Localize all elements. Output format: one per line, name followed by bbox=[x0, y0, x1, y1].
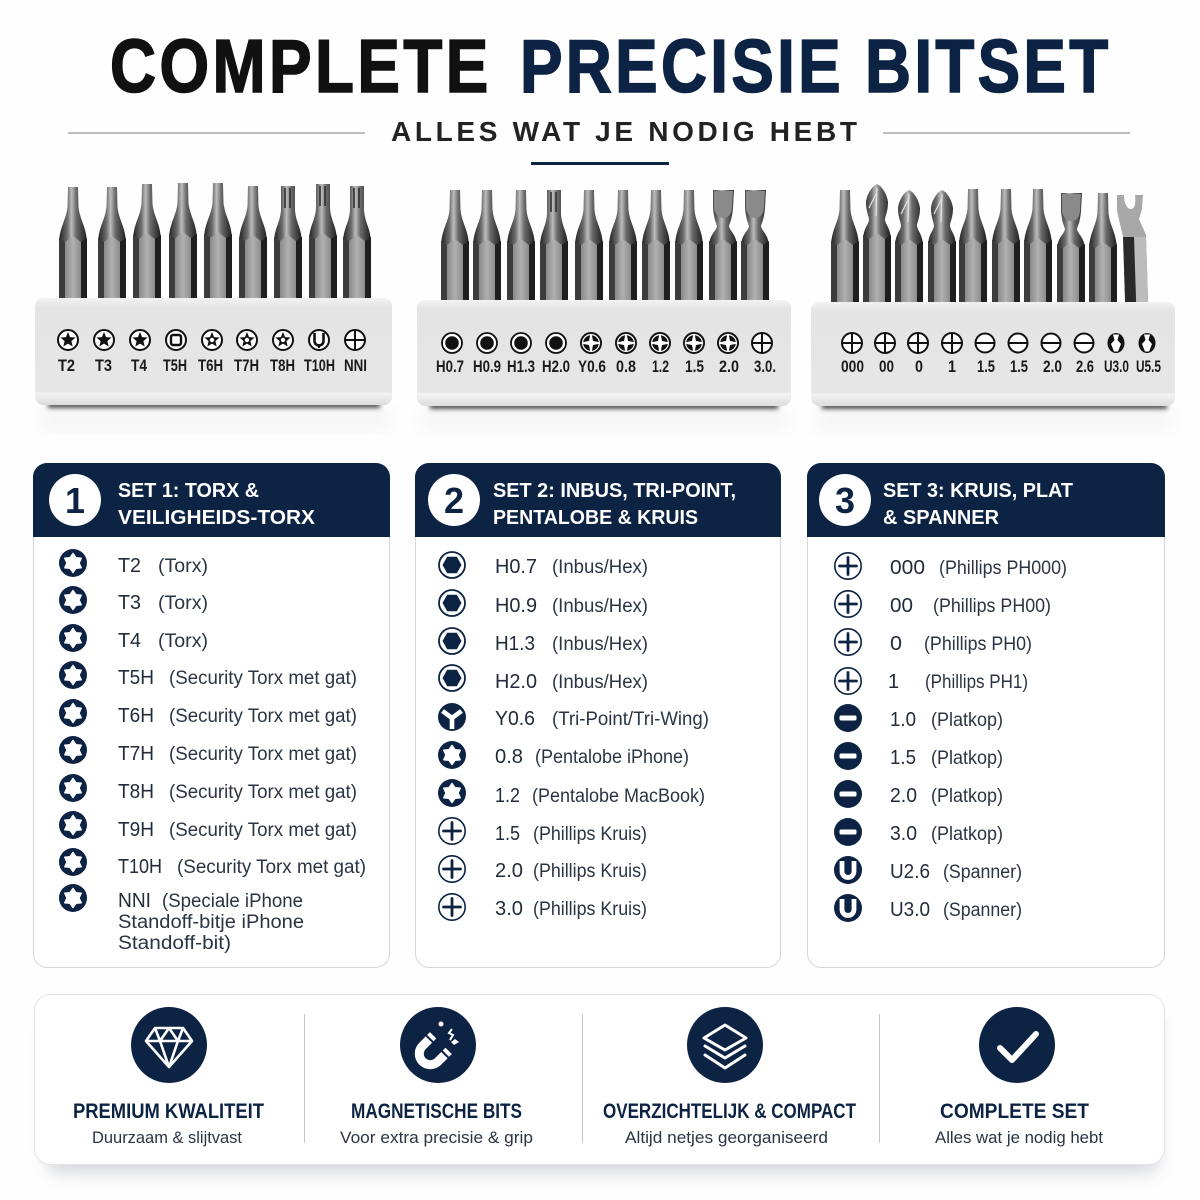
row T8H: T8H bbox=[118, 781, 154, 803]
row 0.8: 0.8 bbox=[495, 746, 523, 768]
title bbox=[110, 24, 1108, 108]
row 00: 00 bbox=[890, 595, 913, 617]
row NNI: Standoff-bitje iPhone bbox=[118, 912, 304, 933]
product photo: set 1 bit holder: T3 bbox=[95, 356, 112, 375]
product photo: set 3 bit holder: 1.5 bbox=[1010, 357, 1028, 376]
icon: diamond bbox=[131, 1007, 207, 1083]
row 000: 000 bbox=[890, 557, 925, 579]
panel header: set 1 bbox=[33, 463, 390, 537]
row U3.0: (Spanner) bbox=[943, 900, 1022, 921]
bits of set 2 bbox=[441, 190, 769, 325]
product photo: set 2 bit holder: H0.7 bbox=[436, 357, 464, 376]
row T9H bbox=[59, 811, 357, 841]
row 3.0 bbox=[834, 818, 1003, 846]
row 2.0: (Phillips Kruis) bbox=[533, 861, 647, 882]
product photo: set 1 bit holder: T4 bbox=[131, 356, 147, 375]
panel header: set 2: SET 2: INBUS, TRI-POINT, bbox=[493, 480, 736, 502]
row T6H: (Security Torx met gat) bbox=[169, 706, 357, 727]
row H0.7: H0.7 bbox=[495, 556, 537, 578]
subtitle: ALLES WAT JE NODIG HEBT bbox=[391, 116, 857, 147]
row H0.7: (Inbus/Hex) bbox=[552, 557, 648, 578]
feature: premium kwaliteit bbox=[73, 1007, 264, 1147]
row T10H bbox=[59, 848, 366, 878]
feature: magnetische bits bbox=[340, 1007, 533, 1147]
row 1.0: (Platkop) bbox=[931, 710, 1003, 731]
row 3.0: 3.0 bbox=[495, 898, 523, 920]
row T9H: (Security Torx met gat) bbox=[169, 820, 357, 841]
row 1.5: 1.5 bbox=[890, 747, 916, 769]
row H1.3: (Inbus/Hex) bbox=[552, 634, 648, 655]
product photo: set 3 bit holder: U3.0 bbox=[1104, 357, 1129, 376]
row T8H: (Security Torx met gat) bbox=[169, 782, 357, 803]
row T7H bbox=[59, 736, 357, 765]
row T4: T4 bbox=[118, 630, 141, 652]
row 2.0: 2.0 bbox=[495, 860, 523, 882]
row 3.0: (Phillips Kruis) bbox=[533, 899, 647, 920]
feature: magnetische bits: Voor extra precisie & grip bbox=[340, 1129, 533, 1147]
row 3.0: 3.0 bbox=[890, 823, 917, 845]
product photo: set 1 bit holder: T8H bbox=[270, 356, 295, 375]
feature: complete set: COMPLETE SET bbox=[940, 1100, 1089, 1123]
product photo: set 1 bit holder: NNI bbox=[344, 356, 367, 375]
row 1.5: (Phillips Kruis) bbox=[533, 824, 647, 845]
row T9H: T9H bbox=[118, 819, 154, 841]
panel: set 1 bbox=[33, 463, 390, 968]
row 0.8: (Pentalobe iPhone) bbox=[535, 747, 689, 768]
row 1 bbox=[835, 668, 1028, 694]
row H2.0 bbox=[439, 665, 648, 693]
panel header: set 2: PENTALOBE & KRUIS bbox=[493, 507, 698, 529]
row 1.5: (Platkop) bbox=[931, 748, 1003, 769]
row 00: (Phillips PH00) bbox=[933, 596, 1051, 617]
bits of set 1 bbox=[59, 183, 371, 322]
panel header: set 1: SET 1: TORX & bbox=[118, 480, 259, 502]
panel: feature strip bbox=[34, 994, 1164, 1174]
product photo: set 3 bit holder: 0 bbox=[915, 357, 923, 376]
product photo: set 2 bit holder: 1.5 bbox=[685, 357, 704, 376]
title: PRECISIE BITSET bbox=[520, 24, 1108, 108]
row T4 bbox=[59, 624, 208, 652]
row 0: 0 bbox=[890, 633, 902, 655]
row H1.3 bbox=[439, 628, 648, 655]
row 0.8 bbox=[438, 741, 689, 769]
product photo: set 3 bit holder bbox=[811, 184, 1175, 431]
row H2.0: H2.0 bbox=[495, 671, 537, 693]
panel header: set 3: 3 bbox=[835, 480, 855, 521]
product photo: set 1 bit holder: T2 bbox=[58, 356, 75, 375]
product photo: set 3 bit holder: 1 bbox=[948, 357, 956, 376]
row NNI: NNI bbox=[118, 890, 151, 912]
product photo: set 2 bit holder: H2.0 bbox=[542, 357, 570, 376]
feature: overzichtelijk en compact: OVERZICHTELIJK & COMPACT bbox=[603, 1100, 856, 1123]
icon: layers bbox=[687, 1007, 763, 1083]
row U2.6 bbox=[834, 856, 1022, 884]
product photo: set 1 bit holder bbox=[35, 183, 392, 430]
row H1.3: H1.3 bbox=[495, 633, 535, 655]
feature: magnetische bits: MAGNETISCHE BITS bbox=[351, 1100, 522, 1123]
product photo: set 2 bit holder: H1.3 bbox=[507, 357, 535, 376]
product photo: set 2 bit holder: 1.2 bbox=[652, 357, 669, 376]
product photo: set 2 bit holder: H0.9 bbox=[473, 357, 501, 376]
row 1.2 bbox=[438, 779, 705, 807]
row T3: (Torx) bbox=[158, 593, 208, 614]
product photo: set 3 bit holder: U5.5 bbox=[1136, 357, 1161, 376]
row Y0.6: Y0.6 bbox=[495, 708, 535, 730]
row T3: T3 bbox=[118, 592, 141, 614]
row 000 bbox=[835, 553, 1067, 579]
row T7H: T7H bbox=[118, 743, 154, 765]
product photo: set 3 bit holder: 2.0 bbox=[1043, 357, 1062, 376]
row T2 bbox=[59, 549, 208, 577]
row 0: (Phillips PH0) bbox=[924, 634, 1032, 655]
row T10H: T10H bbox=[118, 856, 162, 878]
row 0 bbox=[835, 629, 1032, 655]
row T6H: T6H bbox=[118, 705, 154, 727]
product photo: set 2 bit holder: 2.0 bbox=[719, 357, 739, 376]
row 000: (Phillips PH000) bbox=[939, 558, 1067, 579]
row 1.2: (Pentalobe MacBook) bbox=[532, 786, 705, 807]
feature: premium kwaliteit: PREMIUM KWALITEIT bbox=[73, 1100, 264, 1123]
row 1: (Phillips PH1) bbox=[925, 672, 1028, 693]
feature: overzichtelijk en compact: Altijd netjes georganiseerd bbox=[625, 1129, 828, 1147]
product photo: set 1 bit holder: T5H bbox=[163, 356, 187, 375]
row 1.0 bbox=[834, 704, 1003, 732]
row H0.9: (Inbus/Hex) bbox=[552, 596, 648, 617]
row U3.0: U3.0 bbox=[890, 899, 930, 921]
row 2.0 bbox=[439, 856, 647, 882]
panel header: set 1: 1 bbox=[65, 480, 85, 521]
panel: set 2 bbox=[415, 463, 781, 968]
row H0.7 bbox=[439, 552, 648, 578]
panel header: set 2: 2 bbox=[444, 480, 464, 521]
panel header: set 3: & SPANNER bbox=[883, 507, 1000, 529]
panel: set 3 bbox=[807, 463, 1165, 968]
row 1.5: 1.5 bbox=[495, 823, 520, 845]
row NNI: Standoff-bit) bbox=[118, 933, 231, 954]
row 1.0: 1.0 bbox=[890, 709, 916, 731]
row T4: (Torx) bbox=[158, 631, 208, 652]
product photo: set 2 bit holder: 0.8 bbox=[616, 357, 636, 376]
panel header: set 3 bbox=[807, 463, 1165, 537]
row U3.0 bbox=[834, 894, 1022, 922]
row T8H bbox=[59, 774, 357, 803]
product photo: set 2 bit holder: Y0.6 bbox=[578, 357, 606, 376]
product photo: set 2 bit holder: 3.0. bbox=[754, 357, 776, 376]
product photo: set 1 bit holder: T10H bbox=[304, 356, 335, 375]
row H2.0: (Inbus/Hex) bbox=[552, 672, 648, 693]
row T10H: (Security Torx met gat) bbox=[177, 857, 366, 878]
product photo: set 3 bit holder: 00 bbox=[879, 357, 894, 376]
row 3.0: (Platkop) bbox=[931, 824, 1003, 845]
product photo: set 2 bit holder bbox=[417, 190, 791, 431]
row 1: 1 bbox=[888, 671, 899, 693]
row NNI bbox=[59, 884, 304, 954]
row 2.0 bbox=[834, 780, 1003, 808]
title: COMPLETE bbox=[110, 24, 488, 108]
row T3 bbox=[59, 586, 208, 614]
panel header: set 1: VEILIGHEIDS-TORX bbox=[118, 507, 316, 529]
feature: complete set: Alles wat je nodig hebt bbox=[935, 1129, 1103, 1147]
row 2.0: 2.0 bbox=[890, 785, 917, 807]
row NNI: (Speciale iPhone bbox=[162, 891, 303, 912]
row T2: T2 bbox=[118, 555, 141, 577]
bits of set 3 bbox=[831, 184, 1149, 330]
row H0.9: H0.9 bbox=[495, 595, 537, 617]
feature: overzichtelijk en compact bbox=[603, 1007, 856, 1147]
row T5H: (Security Torx met gat) bbox=[169, 668, 357, 689]
product photo: set 1 bit holder: T7H bbox=[234, 356, 259, 375]
product photo: set 3 bit holder: 1.5 bbox=[977, 357, 995, 376]
feature: complete set bbox=[935, 1007, 1103, 1147]
row Y0.6 bbox=[438, 703, 709, 731]
icon: magnet bbox=[400, 1007, 476, 1083]
product photo: set 1 bit holder: T6H bbox=[198, 356, 223, 375]
product photo: set 3 bit holder: 000 bbox=[841, 357, 864, 376]
panel header: set 2 bbox=[415, 463, 781, 537]
product photo: set 3 bit holder: 2.6 bbox=[1076, 357, 1094, 376]
row H0.9 bbox=[439, 590, 648, 617]
row 3.0 bbox=[439, 894, 647, 920]
row 1.5 bbox=[439, 818, 647, 845]
row T5H: T5H bbox=[118, 667, 154, 689]
row U2.6: U2.6 bbox=[890, 861, 930, 883]
feature: premium kwaliteit: Duurzaam & slijtvast bbox=[92, 1129, 242, 1147]
row 00 bbox=[835, 591, 1051, 617]
row 2.0: (Platkop) bbox=[931, 786, 1003, 807]
row 1.2: 1.2 bbox=[495, 785, 520, 807]
row T2: (Torx) bbox=[158, 556, 208, 577]
row Y0.6: (Tri-Point/Tri-Wing) bbox=[552, 709, 709, 730]
row U2.6: (Spanner) bbox=[943, 862, 1022, 883]
row T6H bbox=[59, 699, 357, 727]
icon: check mark bbox=[979, 1007, 1055, 1083]
row T5H bbox=[59, 661, 357, 689]
row T7H: (Security Torx met gat) bbox=[169, 744, 357, 765]
row 1.5 bbox=[834, 742, 1003, 770]
panel header: set 3: SET 3: KRUIS, PLAT bbox=[883, 480, 1073, 502]
